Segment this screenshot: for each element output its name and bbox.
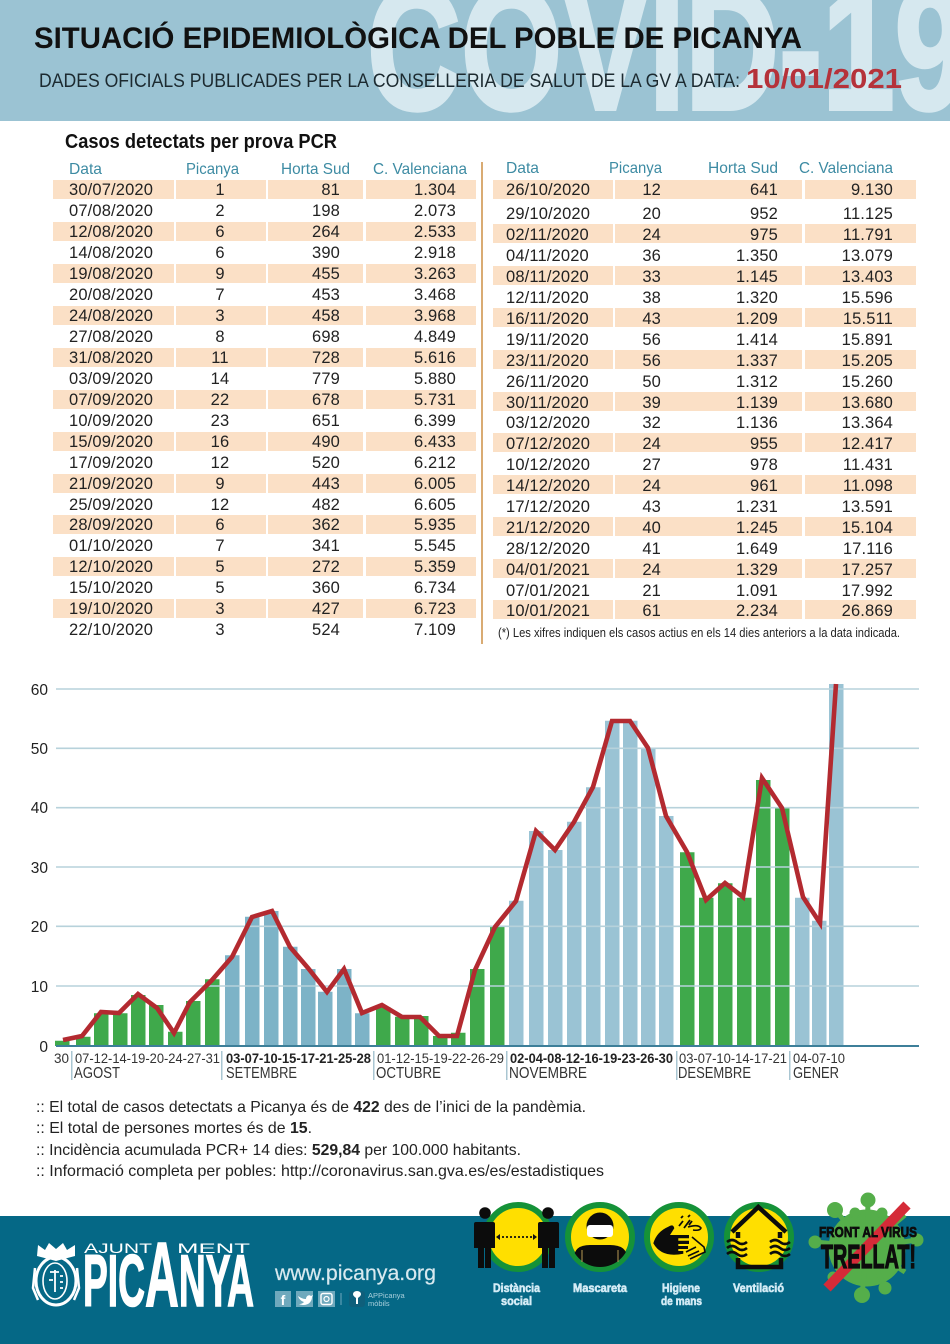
x axis labels: months: NOVEMBRE: [509, 1065, 587, 1082]
data rows: left: 24/08/2020: [69, 307, 153, 325]
data rows: left: 779: [312, 370, 340, 388]
data rows: left: 7: [215, 286, 225, 304]
data rows: right: 13.079: [842, 247, 893, 265]
table heading: Casos detectats per prova PCR: [65, 131, 337, 153]
y axis labels: 10: [31, 979, 48, 996]
data rows: left: 458: [312, 307, 340, 325]
data rows: right: 12: [642, 181, 661, 199]
data rows: left: 2: [215, 202, 225, 220]
data rows: right: 61: [642, 602, 661, 620]
data rows: left: 272: [312, 558, 340, 576]
data rows: left: 07/08/2020: [69, 202, 153, 220]
data rows: right: 955: [750, 435, 778, 453]
data rows: right: 11.125: [843, 205, 893, 223]
data rows: right: 15.260: [842, 373, 893, 391]
data rows: left: 19/08/2020: [69, 265, 153, 283]
data rows: left: 6.433: [414, 433, 456, 451]
summary text block: :: El total de casos detectats a Picanya és de 422 des de l’inici de la pandèmia.: [36, 1099, 586, 1116]
data rows: left: 14: [211, 370, 229, 388]
data rows: right: 32: [642, 414, 661, 432]
data rows: right: 29/10/2020: [506, 205, 590, 223]
data rows: right: 20: [642, 205, 661, 223]
data rows: left: 25/09/2020: [69, 496, 153, 514]
data rows: left: 453: [312, 286, 340, 304]
data rows: right: 04/11/2020: [506, 247, 589, 265]
data rows: right: 11.098: [843, 477, 893, 495]
x axis labels: months: DESEMBRE: [678, 1065, 751, 1082]
data rows: left: 15/10/2020: [69, 579, 153, 597]
data rows: left: 678: [312, 391, 340, 409]
data rows: right: 12.417: [842, 435, 893, 453]
data rows: right: 978: [750, 456, 778, 474]
data rows: left: 443: [312, 475, 340, 493]
table header: left: [69, 161, 467, 178]
icon labels: social: [501, 1294, 532, 1308]
data rows: left: 362: [312, 516, 340, 534]
data rows: left: 5.616: [414, 349, 456, 367]
title: SITUACIÓ EPIDEMIOLÒGICA DEL POBLE DE PICANYA: [34, 21, 802, 55]
data rows: left: 22/10/2020: [69, 621, 153, 639]
data rows: left: 524: [312, 621, 340, 639]
x axis labels: months: SETEMBRE: [226, 1065, 297, 1082]
data rows: right: 15.205: [842, 352, 893, 370]
crossing slash: [827, 1205, 907, 1288]
data rows: left: 490: [312, 433, 340, 451]
data rows: left: 5: [215, 579, 225, 597]
badge: front al virus trellat: FRONT AL VIRUS: [819, 1224, 917, 1241]
data rows: right: 43: [642, 498, 661, 516]
data rows: left: 12: [211, 496, 229, 514]
data rows: right: 12/11/2020: [506, 289, 589, 307]
table header: left: Picanya: [186, 161, 239, 178]
x axis labels: days: 30: [54, 1051, 69, 1066]
data rows: left: 7: [215, 537, 225, 555]
table header: left: C. Valenciana: [373, 161, 467, 178]
data rows: right: 27: [642, 456, 661, 474]
data rows: right: 1.091: [736, 582, 778, 600]
data rows: right: 13.364: [842, 414, 893, 432]
data rows: right: 952: [750, 205, 778, 223]
data rows: right: 39: [642, 394, 661, 412]
bars: blue periods: [225, 911, 370, 1046]
table header: right: Picanya: [609, 160, 662, 177]
data rows: left: 5.359: [414, 558, 456, 576]
x axis labels: days: 04-07-10: [793, 1051, 845, 1066]
data rows: right: 10/01/2021: [506, 602, 590, 620]
data rows: left: 728: [312, 349, 340, 367]
data rows: left: 6: [215, 223, 225, 241]
data rows: right: 24: [642, 435, 661, 453]
data rows: left: 651: [312, 412, 340, 430]
data rows: left: 20/08/2020: [69, 286, 153, 304]
data rows: right: 08/11/2020: [506, 268, 589, 286]
data rows: right: 56: [642, 352, 661, 370]
social icons: APPicanya: [368, 1291, 406, 1300]
x axis labels: months: GENER: [793, 1065, 839, 1082]
data rows: right: 26/10/2020: [506, 181, 590, 199]
x axis labels: days: [54, 1051, 845, 1066]
data rows: left: 482: [312, 496, 340, 514]
data rows: left: 6: [215, 244, 225, 262]
data rows: right: 1.145: [736, 268, 778, 286]
red trend line: [63, 684, 836, 1040]
data rows: left: 6: [215, 516, 225, 534]
data rows: right: 56: [642, 331, 661, 349]
data rows: right: 11.431: [843, 456, 893, 474]
x axis labels: days: 03-07-10-15-17-21-25-28: [226, 1051, 371, 1066]
data rows: right: 19/11/2020: [506, 331, 589, 349]
data rows: right: 2.234: [736, 602, 778, 620]
badge: front al virus trellat: [809, 1193, 923, 1302]
data rows: right: 38: [642, 289, 661, 307]
data rows: right: 26/11/2020: [506, 373, 589, 391]
data rows: right: 21: [642, 582, 661, 600]
y axis labels: 40: [31, 800, 48, 817]
icon: ventilation: [727, 1205, 791, 1269]
summary text block: :: El total de persones mortes és de 15.: [36, 1120, 312, 1137]
table: right column: [493, 160, 916, 620]
data rows: left: 27/08/2020: [69, 328, 153, 346]
table header: right: Data: [506, 160, 539, 177]
data rows: left: 3.263: [414, 265, 456, 283]
data rows: left: 4.849: [414, 328, 456, 346]
data rows: right: 15.511: [843, 310, 893, 328]
data rows: right: 33: [642, 268, 661, 286]
data rows: left: 81: [321, 181, 340, 199]
data rows: left: 2.533: [414, 223, 456, 241]
data rows: left: 520: [312, 454, 340, 472]
data rows: left: 7.109: [414, 621, 456, 639]
data rows: right: 03/12/2020: [506, 414, 590, 432]
icon labels: Higiene: [662, 1281, 700, 1295]
icon labels: Distància: [493, 1281, 540, 1295]
data rows: right: 10/12/2020: [506, 456, 590, 474]
x axis labels: days: 07-12-14-19-20-24-27-31: [75, 1051, 220, 1066]
social icons: mòbils: [368, 1299, 390, 1308]
data rows: right: 1.136: [736, 414, 778, 432]
vertical divider: [481, 162, 483, 644]
data rows: left: 9: [215, 265, 225, 283]
data rows: left: 360: [312, 579, 340, 597]
data rows: right: 21/12/2020: [506, 519, 590, 537]
data rows: right: 02/11/2020: [506, 226, 589, 244]
data rows: right: 07/01/2021: [506, 582, 590, 600]
data rows: left: 8: [215, 328, 225, 346]
data rows: left: 12/08/2020: [69, 223, 153, 241]
icon: virus: [809, 1193, 923, 1302]
data rows: left: 6.605: [414, 496, 456, 514]
data rows: right: 17.116: [843, 540, 893, 558]
data rows: right: 14/12/2020: [506, 477, 590, 495]
icon labels: Ventilació: [733, 1281, 784, 1295]
data rows: left: 01/10/2020: [69, 537, 153, 555]
data rows: right: 1.320: [736, 289, 778, 307]
data rows: left: [69, 181, 456, 639]
data rows: right: 17.992: [842, 582, 893, 600]
data rows: left: 264: [312, 223, 340, 241]
table header: right: Horta Sud: [708, 160, 778, 177]
x axis labels: days: 03-07-10-14-17-21: [679, 1051, 787, 1066]
data rows: left: 30/07/2020: [69, 181, 153, 199]
data rows: left: 14/08/2020: [69, 244, 153, 262]
data rows: right: 975: [750, 226, 778, 244]
data rows: left: 3.968: [414, 307, 456, 325]
x axis labels: months: OCTUBRE: [376, 1065, 441, 1082]
data rows: right: 28/12/2020: [506, 540, 590, 558]
y axis labels: 20: [31, 919, 48, 936]
data rows: left: 11: [211, 349, 229, 367]
table header: right: [506, 160, 893, 177]
data rows: left: 3: [215, 307, 225, 325]
data rows: right: 1.649: [736, 540, 778, 558]
bars: green periods: [55, 780, 790, 1046]
data rows: left: 1.304: [414, 181, 456, 199]
x axis labels: months: [74, 1065, 839, 1082]
header band: [0, 0, 950, 121]
data rows: left: 6.734: [414, 579, 456, 597]
data rows: left: 23: [211, 412, 229, 430]
data rows: left: 2.918: [414, 244, 456, 262]
data rows: left: 1: [215, 181, 225, 199]
social icons: [275, 1291, 406, 1308]
data rows: right: 1.350: [736, 247, 778, 265]
table header: right: C. Valenciana: [799, 160, 893, 177]
data rows: right: 36: [642, 247, 661, 265]
wordmark: MENT: [177, 1240, 251, 1256]
data rows: right: 1.245: [736, 519, 778, 537]
data rows: right: 1.312: [736, 373, 778, 391]
data rows: right: 1.414: [736, 331, 778, 349]
data rows: left: 12: [211, 454, 229, 472]
data rows: left: 5: [215, 558, 225, 576]
data rows: right: 24: [642, 477, 661, 495]
data rows: left: 198: [312, 202, 340, 220]
data rows: right: 17/12/2020: [506, 498, 590, 516]
subtitle: DADES OFICIALS PUBLICADES PER LA CONSELLERIA DE SALUT DE LA GV A DATA:: [39, 70, 740, 92]
data rows: left: 2.073: [414, 202, 456, 220]
data rows: right: [506, 181, 893, 620]
website: www.picanya.org: [274, 1262, 436, 1285]
data rows: left: 31/08/2020: [69, 349, 153, 367]
summary text block: :: Incidència acumulada PCR+ 14 dies: 529,84 per 100.000 habitants.: [36, 1142, 521, 1159]
icon: social distance: [474, 1205, 559, 1269]
data rows: right: 17.257: [842, 561, 893, 579]
x axis labels: days: 02-04-08-12-16-19-23-26-30: [510, 1051, 673, 1066]
data rows: right: 1.231: [736, 498, 778, 516]
footer band: [0, 1216, 950, 1344]
table header: left: Data: [69, 161, 102, 178]
data rows: left: 19/10/2020: [69, 600, 153, 618]
date: 10/01/2021: [746, 63, 902, 94]
data rows: left: 3.468: [414, 286, 456, 304]
y axis labels: [31, 682, 48, 1056]
social icons: f: [281, 1292, 286, 1308]
data rows: left: 427: [312, 600, 340, 618]
data rows: left: 5.545: [414, 537, 456, 555]
data rows: left: 9: [215, 475, 225, 493]
icon: hand hygiene: [647, 1205, 711, 1269]
y axis labels: 50: [31, 741, 48, 758]
wordmark: PICANYA: [83, 1224, 254, 1326]
table: left column: [53, 161, 476, 639]
data rows: right: 13.591: [842, 498, 893, 516]
data rows: right: 24: [642, 561, 661, 579]
data rows: right: 9.130: [851, 181, 893, 199]
y axis labels: 0: [39, 1039, 48, 1056]
icon labels: [493, 1281, 784, 1308]
data rows: left: 3: [215, 621, 225, 639]
data rows: right: 1.337: [736, 352, 778, 370]
data rows: left: 15/09/2020: [69, 433, 153, 451]
bars: light blue periods: [509, 684, 844, 1046]
data rows: right: 961: [750, 477, 778, 495]
data rows: right: 26.869: [842, 602, 893, 620]
table header: left: Horta Sud: [281, 161, 350, 178]
data rows: right: 13.403: [842, 268, 893, 286]
y axis labels: 60: [31, 682, 48, 699]
data rows: right: 30/11/2020: [506, 394, 589, 412]
data rows: right: 24: [642, 226, 661, 244]
x axis labels: months: AGOST: [74, 1065, 120, 1082]
data rows: left: 341: [312, 537, 340, 555]
data rows: right: 13.680: [842, 394, 893, 412]
data rows: left: 03/09/2020: [69, 370, 153, 388]
logo: Ajuntament de Picanya: [33, 1224, 254, 1326]
data rows: right: 1.329: [736, 561, 778, 579]
shaded rows: left: [53, 180, 476, 618]
data rows: left: 12/10/2020: [69, 558, 153, 576]
data rows: left: 22: [211, 391, 229, 409]
data rows: left: 07/09/2020: [69, 391, 153, 409]
data rows: left: 10/09/2020: [69, 412, 153, 430]
data rows: left: 28/09/2020: [69, 516, 153, 534]
data rows: left: 390: [312, 244, 340, 262]
data rows: left: 6.723: [414, 600, 456, 618]
wordmark: AJUNT: [84, 1240, 153, 1256]
shaded rows: right: [493, 180, 916, 619]
data rows: right: 641: [750, 181, 778, 199]
data rows: right: 07/12/2020: [506, 435, 590, 453]
data rows: right: 50: [642, 373, 661, 391]
data rows: left: 698: [312, 328, 340, 346]
data rows: left: 16: [211, 433, 229, 451]
bar and line chart: [31, 682, 919, 1082]
data rows: right: 1.209: [736, 310, 778, 328]
data rows: left: 3: [215, 600, 225, 618]
y axis labels: 30: [31, 860, 48, 877]
data rows: right: 43: [642, 310, 661, 328]
x axis labels: days: 01-12-15-19-22-26-29: [377, 1051, 504, 1066]
data rows: left: 6.399: [414, 412, 456, 430]
summary text block: [36, 1099, 604, 1180]
data rows: right: 15.891: [842, 331, 893, 349]
data rows: right: 16/11/2020: [506, 310, 589, 328]
data rows: right: 11.791: [843, 226, 893, 244]
data rows: left: 455: [312, 265, 340, 283]
data rows: right: 41: [642, 540, 661, 558]
summary text block: :: Informació completa per pobles: http://coronavirus.san.gva.es/es/estadistiques: [36, 1163, 604, 1180]
data rows: right: 15.596: [842, 289, 893, 307]
data rows: right: 40: [642, 519, 661, 537]
icon labels: Mascareta: [573, 1281, 627, 1295]
data rows: left: 21/09/2020: [69, 475, 153, 493]
data rows: left: 6.005: [414, 475, 456, 493]
data rows: left: 5.880: [414, 370, 456, 388]
data rows: right: 15.104: [842, 519, 893, 537]
icon: face mask: [568, 1205, 632, 1270]
data rows: left: 5.731: [414, 391, 456, 409]
data rows: left: 5.935: [414, 516, 456, 534]
data rows: right: 04/01/2021: [506, 561, 590, 579]
data rows: right: 1.139: [736, 394, 778, 412]
data rows: right: 23/11/2020: [506, 352, 589, 370]
icon: municipal crest: [33, 1243, 79, 1305]
icon labels: de mans: [661, 1294, 702, 1308]
data rows: left: 6.212: [414, 454, 456, 472]
data rows: left: 17/09/2020: [69, 454, 153, 472]
